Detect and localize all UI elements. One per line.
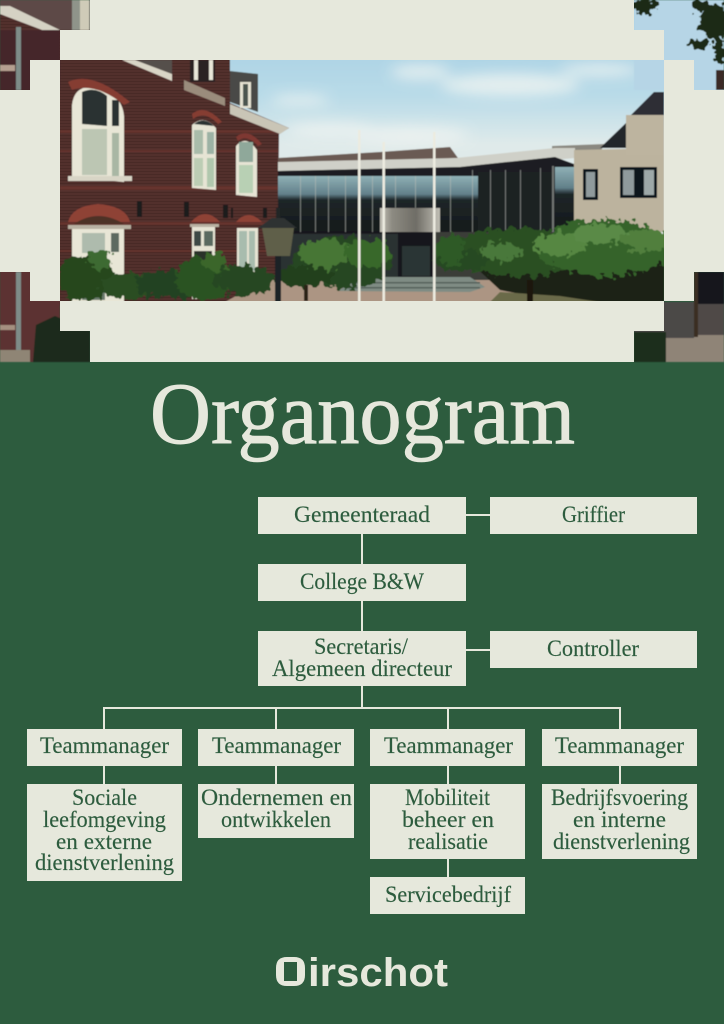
beige building [574,92,664,232]
box: Sociale leefomgeving en externe dienstverlening [27,784,182,881]
brick building [0,0,289,305]
box: Sociale leefomgeving en externe dienstverlening: Sociale [72,785,137,810]
title: Organogram [150,366,575,463]
box: Mobiliteit beheer en realisatie [370,784,525,859]
box: Griffier [490,497,697,534]
box: Teammanager 3: Teammanager [384,733,513,758]
box: Secretaris / Algemeen directeur: Secretaris/ [314,634,409,659]
box: Secretaris / Algemeen directeur [258,631,466,686]
box: Bedrijfsvoering en interne dienstverlening: en interne [573,807,666,832]
photo: town hall of Oirschot [0,0,724,362]
surrounding photo, left edge [0,0,90,362]
trees and hedges [55,220,673,302]
box: Ondernemen en ontwikkelen: Ondernemen en [201,785,353,810]
box: Gemeenteraad: Gemeenteraad [294,502,430,527]
box: Sociale leefomgeving en externe dienstverlening: en externe [56,829,152,854]
box: College B&W: College B&W [300,569,424,594]
box: Sociale leefomgeving en externe dienstverlening: leefomgeving [43,807,166,832]
box: Teammanager 4 [542,729,697,766]
connector lines [104,515,620,877]
box: Bedrijfsvoering en interne dienstverlening: Bedrijfsvoering [551,785,688,810]
box: Teammanager 2: Teammanager [212,733,341,758]
box: Mobiliteit beheer en realisatie: beheer en [402,807,495,832]
box: Ondernemen en ontwikkelen: ontwikkelen [221,807,331,832]
box: Bedrijfsvoering en interne dienstverlening [542,784,697,859]
box: Teammanager 1 [27,729,182,766]
wall ornaments [137,201,267,218]
box: Teammanager 2 [198,729,354,766]
box: Ondernemen en ontwikkelen [198,784,354,838]
sky [220,0,724,240]
box: Mobiliteit beheer en realisatie: realisatie [408,829,488,854]
window 3 [236,133,262,197]
modern glass building [278,144,605,282]
box: Teammanager 1: Teammanager [40,733,169,758]
logo: Oirschot: irschot [308,951,448,995]
cream photo frame [0,0,724,362]
box: Servicebedrijf [370,877,525,914]
box: Teammanager 3 [370,729,525,766]
box: Mobiliteit beheer en realisatie: Mobiliteit [405,785,491,810]
window 2 [192,110,222,190]
box: Sociale leefomgeving en externe dienstverlening: dienstverlening [35,850,174,875]
box: Controller: Controller [547,636,639,661]
box: Controller [490,631,697,668]
box: Bedrijfsvoering en interne dienstverlening: dienstverlening [553,829,690,854]
box: Griffier: Griffier [562,502,625,527]
street lantern [258,208,297,302]
box: Servicebedrijf: Servicebedrijf [385,882,511,907]
box: Teammanager 4: Teammanager [555,733,684,758]
box: Secretaris / Algemeen directeur: Algemeen directeur [272,656,452,681]
surrounding photo, right edge [631,0,724,362]
box: Gemeenteraad [258,497,466,534]
window 1 [68,79,132,182]
box: College B&W [258,564,466,601]
lower windows [68,204,262,303]
flag poles [358,130,436,302]
square and steps [225,255,664,302]
